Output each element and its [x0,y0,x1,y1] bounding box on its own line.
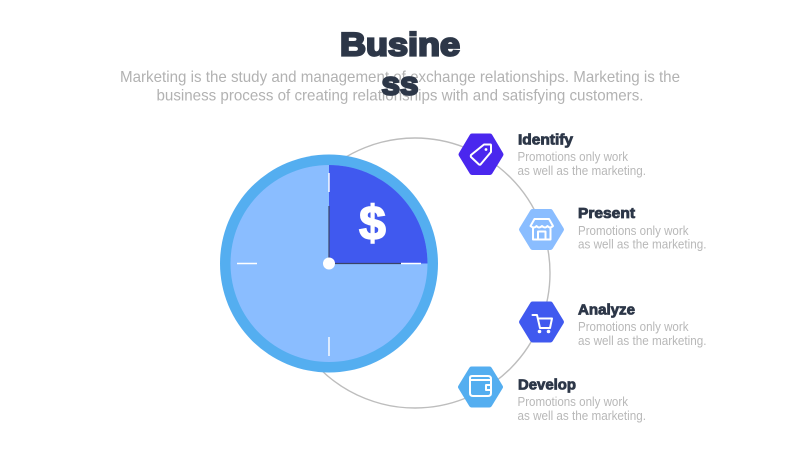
title: Busine [340,26,460,62]
label: as well as the marketing. [518,409,646,423]
label: Analyze [578,302,635,318]
clock diagram [220,154,438,372]
clock face [230,165,428,362]
label: Present [578,206,635,222]
label [518,378,646,423]
label: Promotions only work [518,150,629,164]
label: Develop [518,378,576,394]
subtitle: business process of creating relationships with and satisfying customers. [156,88,644,104]
step: Analyze [522,302,706,348]
title [340,26,460,102]
step: Present [522,206,706,252]
hexagon icon: store [522,212,562,248]
label: as well as the marketing. [518,164,646,178]
hexagon icon: wallet [460,369,500,405]
label [578,206,706,252]
label: Promotions only work [518,395,629,409]
clock centre pin [323,258,335,270]
highlighted quarter [329,165,428,264]
label: Promotions only work [578,224,689,238]
step: Develop [460,369,646,423]
hexagon icon: cart [522,304,562,340]
dollar sign: $ [359,198,386,250]
step: Identify [461,132,646,178]
subtitle [120,69,680,104]
label: as well as the marketing. [578,334,706,348]
label: as well as the marketing. [578,238,706,252]
clock outer ring [220,154,438,372]
label [518,132,646,178]
clock ticks [237,173,421,356]
orbit ring [280,138,550,408]
label [578,302,706,348]
subtitle: Marketing is the study and management of exchange relationships. Marketing is the [120,69,680,86]
label: Promotions only work [578,320,689,334]
label: Identify [518,132,573,148]
hexagon icon: tag [461,136,501,172]
quarter edges [329,206,401,264]
title: ss [382,66,418,102]
